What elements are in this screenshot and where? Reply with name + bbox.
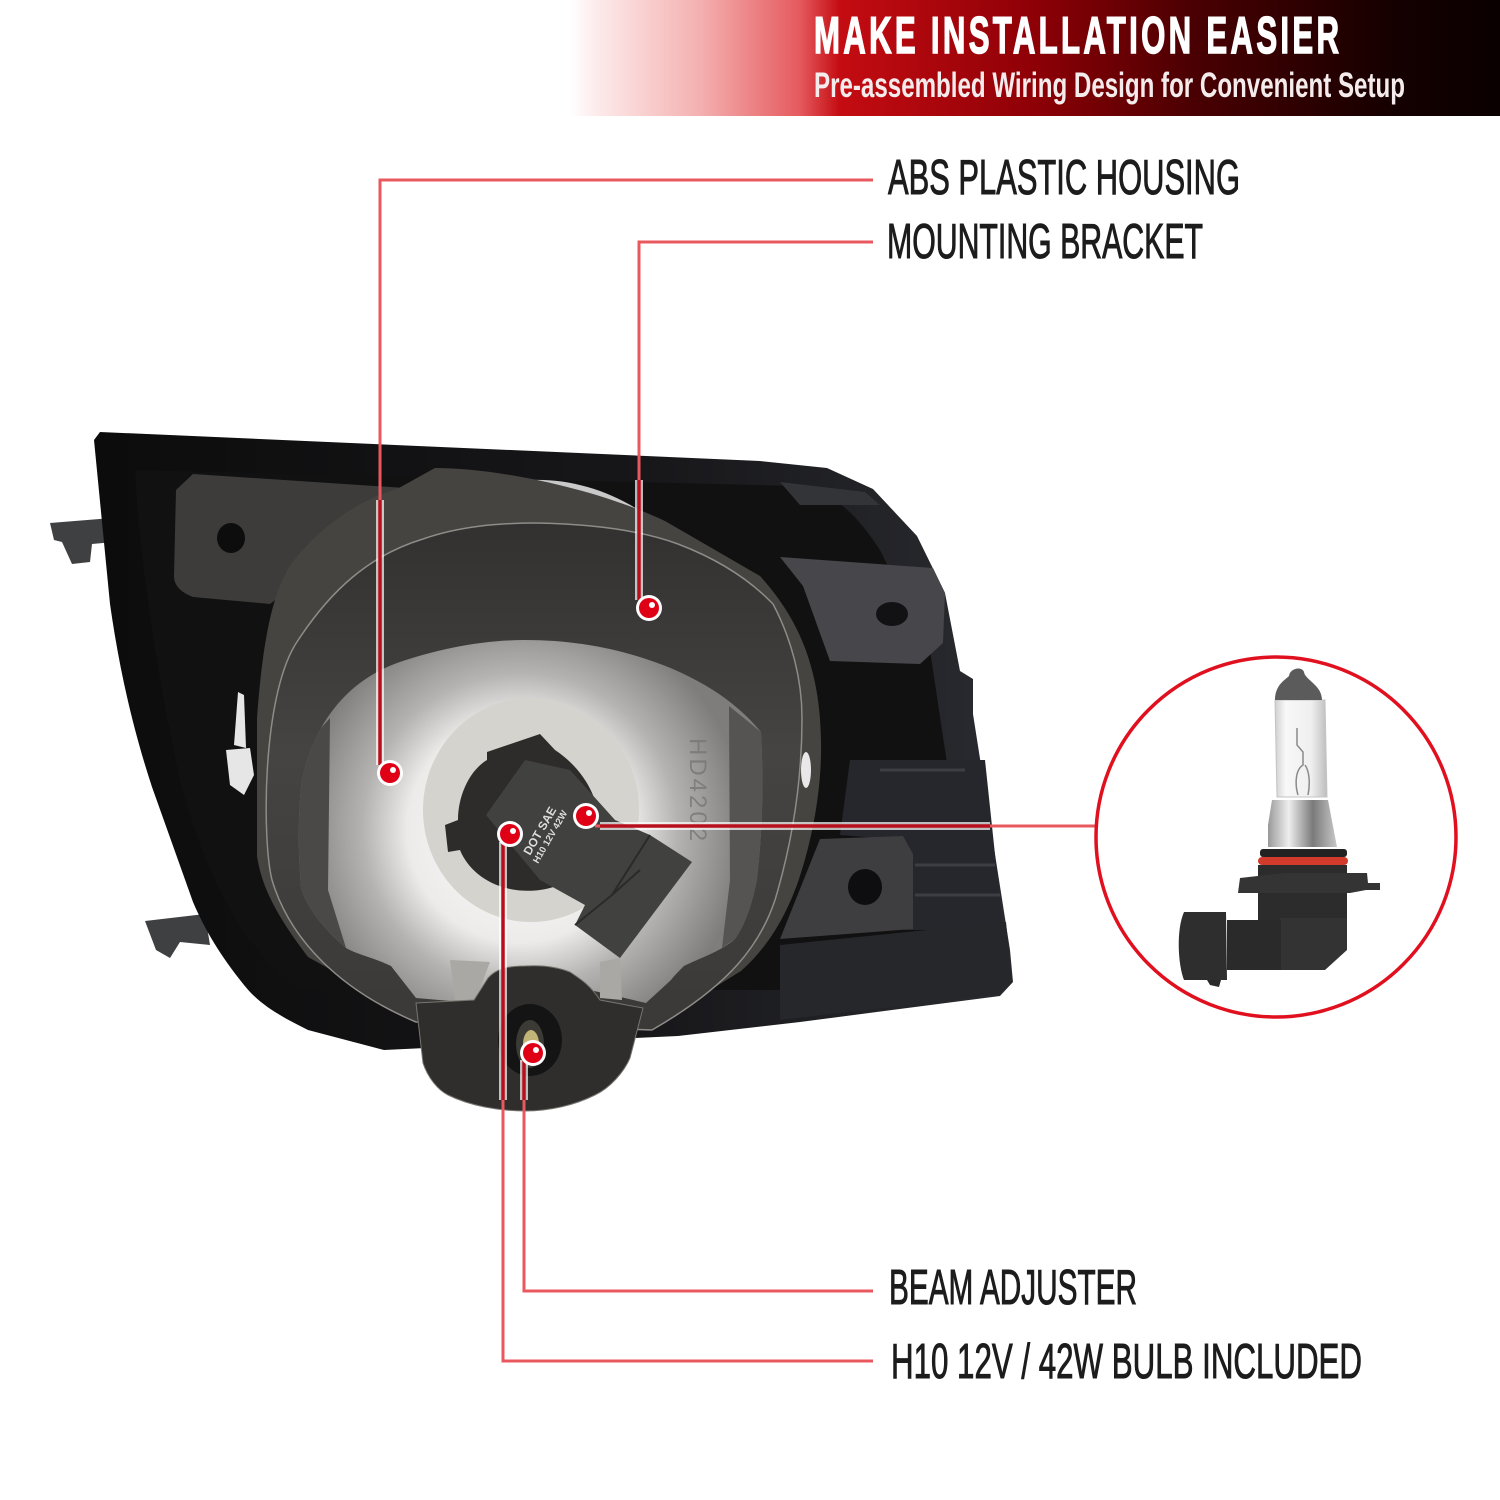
bezel inner panel [135,470,975,990]
bulb callout circle [1096,657,1456,1017]
right lower hole [848,869,882,905]
connector end [1179,912,1227,980]
bulb glass [1275,700,1327,797]
red o-ring [1258,857,1348,865]
left mounting tabs [50,518,210,958]
side clip [226,692,254,795]
right upper hole [876,602,908,626]
connector marking: DOT SAE [520,804,559,858]
fog light assembly [50,432,1013,1111]
callout dots [377,595,662,1066]
label: ABS plastic housing: ABS PLASTIC HOUSING [888,151,1240,205]
metal base [1268,800,1337,847]
adjuster ear [416,966,643,1111]
connector inner edge [575,835,650,925]
connector rating: H10 12V 42W [531,809,570,866]
right lower bracket [780,836,913,939]
header title: MAKE INSTALLATION EASIER [814,7,1339,65]
bulb socket [445,734,600,891]
horizontal tube [1227,920,1281,970]
header banner [570,0,1500,116]
right slate panel lower [840,760,1003,930]
window left shadow [299,718,346,948]
rear bezel [94,432,1013,1050]
upper flange [1260,849,1347,857]
side flange [1238,873,1380,893]
adjuster bolt [498,1004,562,1076]
right upper bracket [780,557,945,664]
lower reflector block [450,958,622,1003]
top right ledge [780,482,880,505]
housing outer ring [257,468,821,1026]
light reflector window [299,640,762,1003]
right base strip [780,922,1012,1020]
upper left bracket [174,474,420,604]
lens highlight at top [488,480,650,518]
right horizontal ribs [880,770,1000,895]
label: beam adjuster: BEAM ADJUSTER [889,1261,1137,1315]
housing dark cap [266,523,802,1030]
bulb tip [1275,669,1322,700]
bulb connector [486,760,692,958]
elbow [1280,918,1347,970]
bulb collar [423,698,639,922]
filament [1296,728,1309,795]
bracket hole [217,523,245,553]
right edge highlight [801,752,811,788]
label: mounting bracket: MOUNTING BRACKET [887,215,1203,269]
connector tab [1207,980,1221,987]
window right shadow [722,706,762,948]
housing part code: HD4202 [684,738,711,844]
leader lines [380,180,1095,1361]
bulb body [1258,865,1347,921]
